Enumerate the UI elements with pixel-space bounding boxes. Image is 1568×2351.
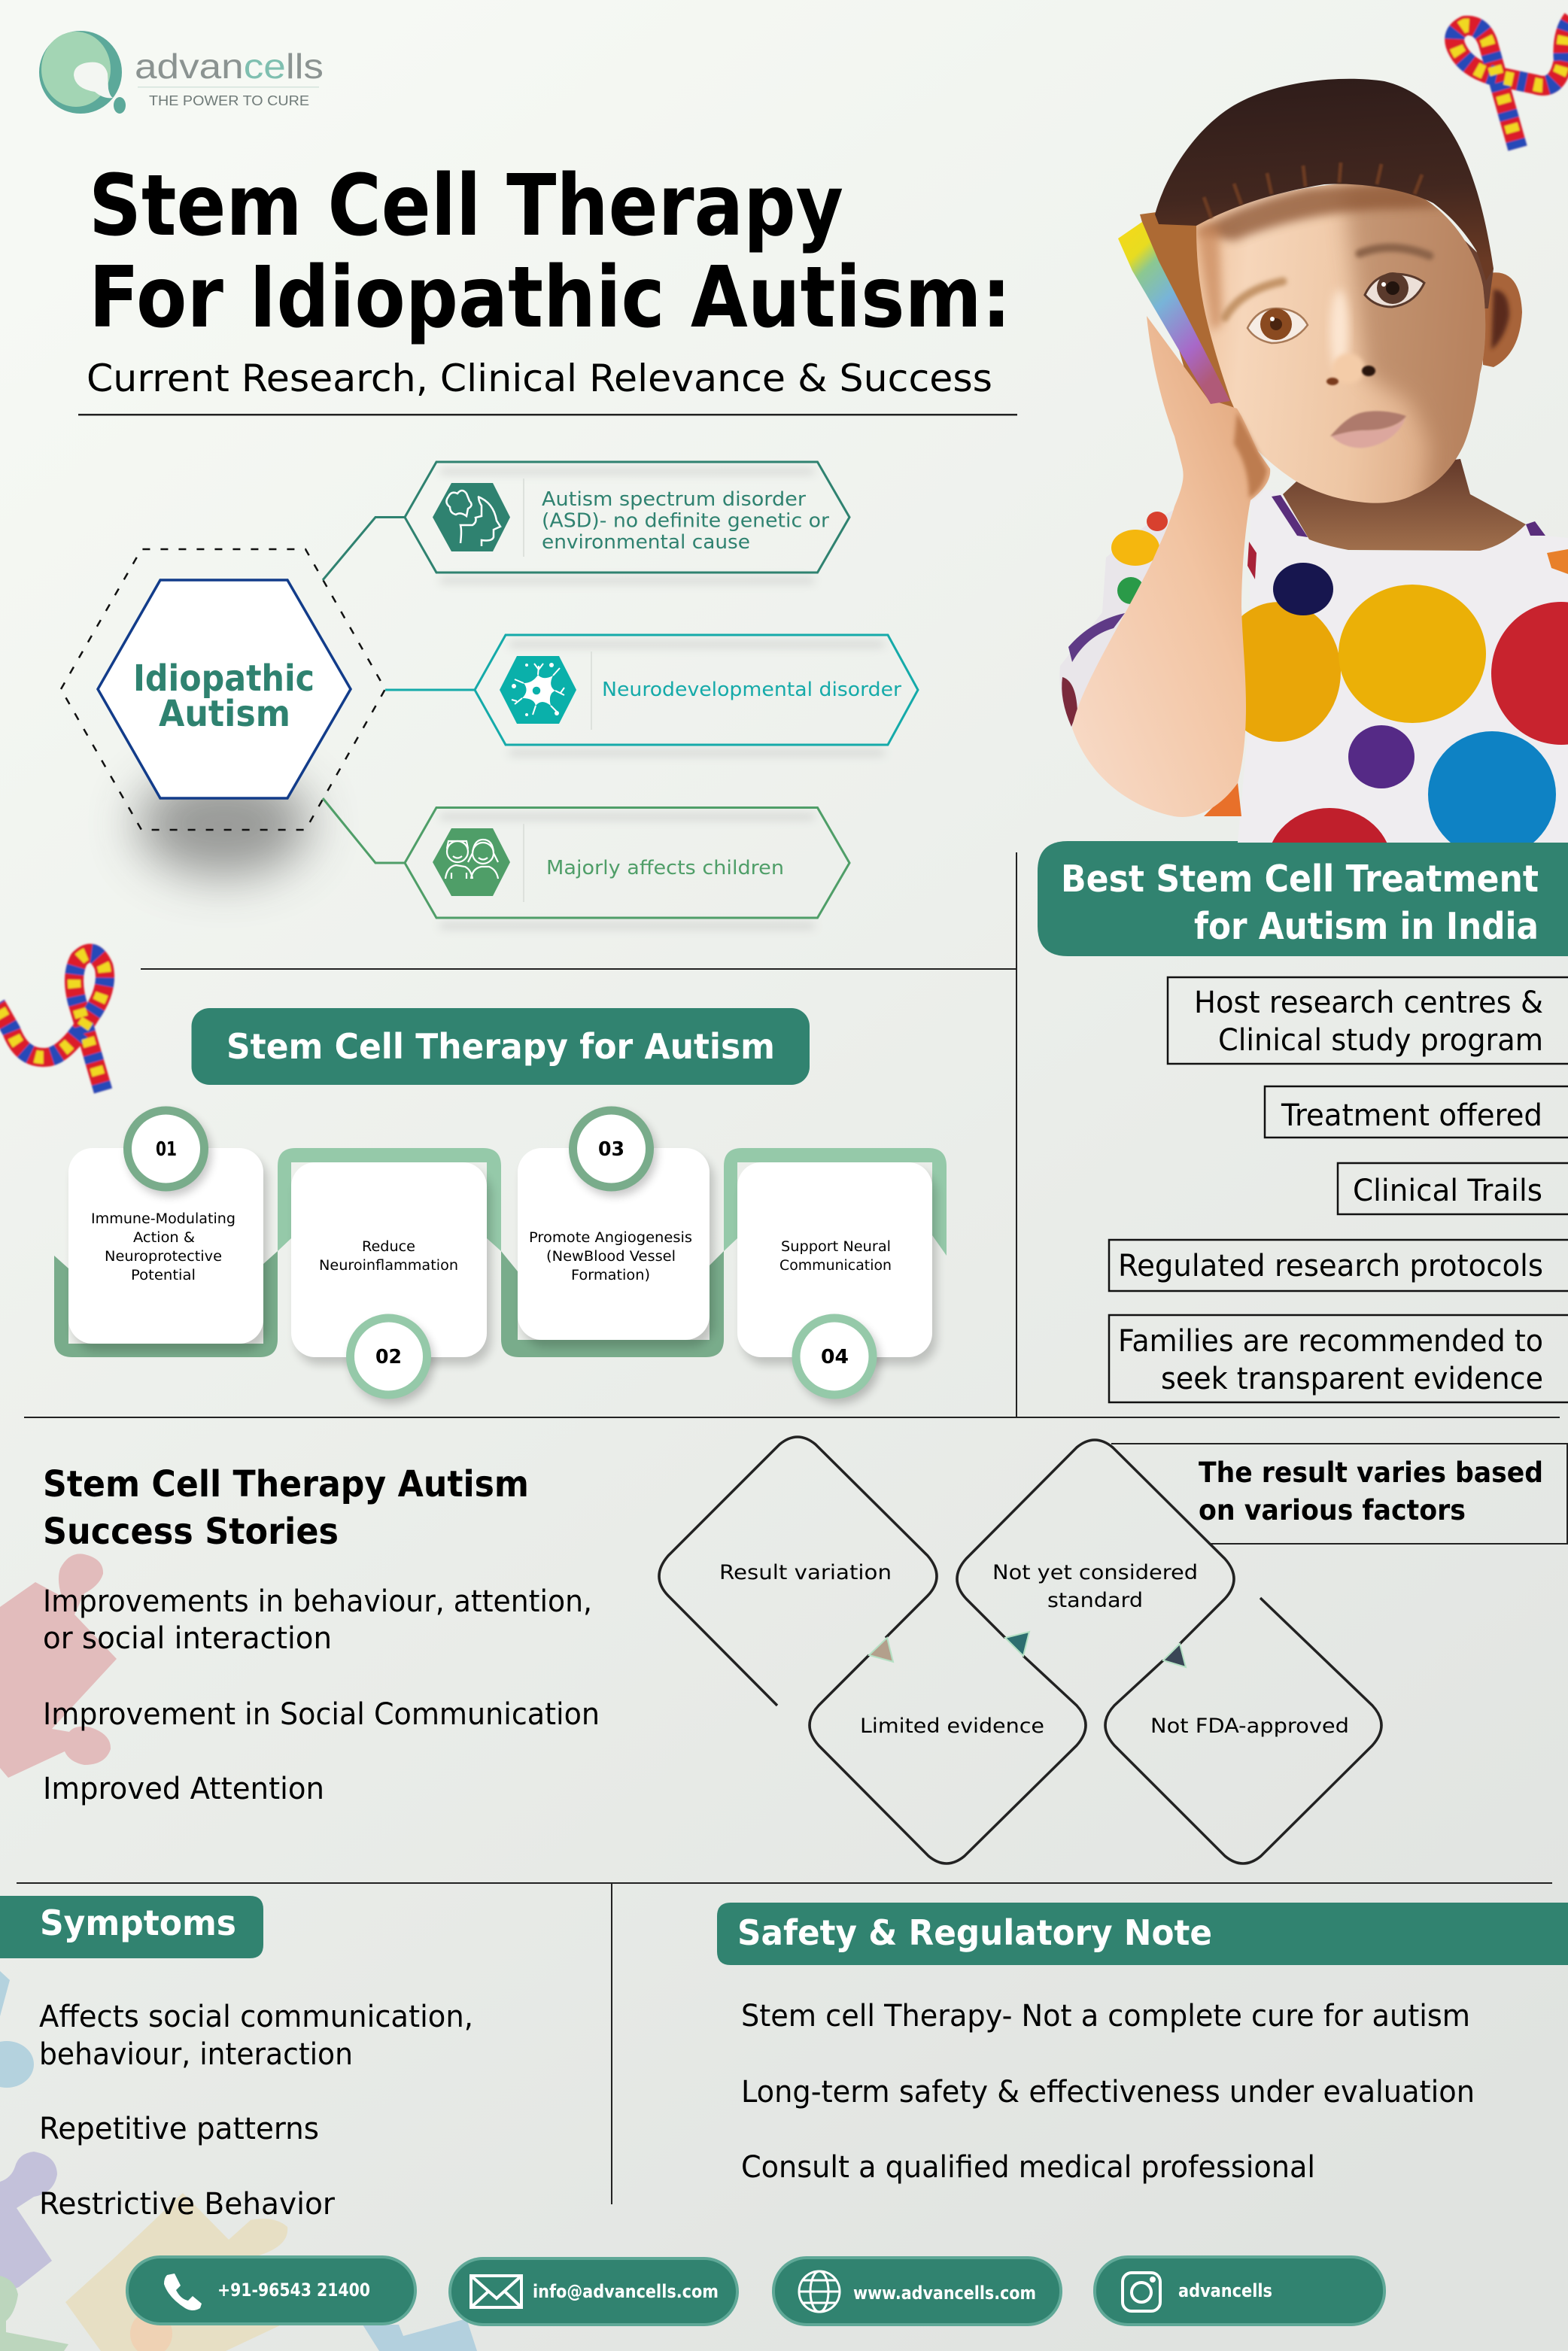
neck [1283, 459, 1526, 551]
diamond: result variation [659, 1437, 937, 1706]
text: success list: Improvement in Social Communication [43, 1697, 600, 1732]
diagram: four linked diamonds [659, 1437, 1381, 1863]
contact pill: instagram [1095, 2257, 1384, 2325]
card 01: Action & [133, 1230, 195, 1246]
box: majorly affects children [405, 808, 849, 928]
sideburn [1140, 205, 1238, 410]
eyebrows [1225, 248, 1430, 317]
shirt [1238, 495, 1568, 843]
card 04 [737, 1162, 937, 1365]
contact pill: instagram: advancells [1178, 2280, 1272, 2301]
heading: success stories: Stem Cell Therapy Autism [43, 1463, 529, 1505]
ear [1483, 272, 1522, 367]
orange patch below arm [1204, 782, 1241, 816]
title: Stem Cell Therapy [89, 157, 843, 255]
text: symptoms list: Repetitive patterns [39, 2112, 319, 2146]
card 02 [291, 1162, 491, 1365]
diagram: idiopathic autism [61, 462, 918, 928]
icon: neuron [500, 656, 576, 724]
heading: success stories: Success Stories [43, 1511, 339, 1553]
contact pill: email [450, 2258, 737, 2325]
banner: best stem cell treatment [1038, 841, 1568, 956]
badge 01: 01 [156, 1138, 177, 1161]
text: symptoms list [39, 2000, 473, 2222]
item: host research: Clinical study program [1218, 1023, 1543, 1058]
arrowhead: teal [1005, 1632, 1029, 1656]
diamond: limited evidence: Limited evidence [860, 1715, 1044, 1738]
text: success list: or social interaction [43, 1621, 332, 1656]
centre hexagon: Idiopathic [133, 658, 315, 700]
icon: two children [433, 828, 510, 896]
heading pill: safety and regulatory note [717, 1903, 1568, 1965]
item: families recommended [1109, 1315, 1568, 1402]
toy [1118, 222, 1230, 404]
arrowhead: tan [869, 1638, 893, 1662]
diamond: not yet considered: standard [1047, 1589, 1143, 1612]
text: safety list: Stem cell Therapy- Not a complete cure for autism [741, 1999, 1470, 2034]
badge 04 [792, 1314, 880, 1404]
badge 01 [123, 1106, 211, 1196]
card 02: Reduce [362, 1239, 415, 1255]
heading pill: symptoms: Symptoms [40, 1903, 236, 1943]
card 01: Potential [131, 1268, 196, 1283]
centre hexagon [98, 580, 351, 798]
card 04: Communication [779, 1258, 892, 1274]
face [1196, 184, 1485, 503]
callout: result varies: on various factors [1199, 1494, 1466, 1526]
contact pill: phone: +91-96543 21400 [217, 2280, 370, 2301]
item: families recommended: Families are recommended to [1118, 1324, 1543, 1359]
item: clinical trails: Clinical Trails [1353, 1174, 1542, 1208]
diamond: result variation: Result variation [719, 1561, 892, 1584]
text: safety list: Long-term safety & effectiveness under evaluation [741, 2075, 1475, 2110]
icon: globe [799, 2271, 840, 2312]
item: treatment offered [1265, 1086, 1568, 1138]
diamond: limited evidence [810, 1655, 1086, 1863]
text: safety list: Consult a qualified medical professional [741, 2150, 1315, 2185]
diamond: not yet considered: Not yet considered [992, 1561, 1198, 1584]
card 03: (NewBlood Vessel [546, 1249, 676, 1265]
badge 04: 04 [821, 1346, 849, 1368]
hair [1155, 79, 1494, 281]
heading: success stories [43, 1463, 529, 1553]
contact pill: website: www.advancells.com [853, 2283, 1036, 2304]
text: symptoms list: behaviour, interaction [39, 2037, 353, 2072]
dashed hexagon [61, 549, 385, 830]
card 04: Support Neural [781, 1239, 891, 1255]
icon: instagram [1123, 2273, 1160, 2311]
ribbon backing [54, 1148, 947, 1357]
box: autism spectrum disorder: (ASD)- no definite genetic or [542, 510, 829, 533]
title [89, 157, 1011, 347]
diamond: not fda-approved [1105, 1598, 1381, 1863]
box: autism spectrum disorder: environmental cause [542, 531, 750, 554]
card 01: Immune-Modulating [91, 1211, 236, 1227]
logo: advancells [39, 31, 324, 114]
item: regulated protocols [1109, 1240, 1568, 1291]
badge 03 [569, 1106, 657, 1196]
arrowhead: navy [1163, 1644, 1186, 1667]
connector lines [323, 518, 475, 863]
icon: head with puzzle piece [433, 483, 510, 551]
icon: envelope [471, 2276, 521, 2307]
diamond: not fda-approved: Not FDA-approved [1150, 1715, 1349, 1738]
heading pill: safety and regulatory note: Safety & Regulatory Note [737, 1912, 1212, 1953]
callout: result varies [1111, 1444, 1568, 1544]
contact pill: email: info@advancells.com [533, 2281, 719, 2302]
nose [1326, 354, 1375, 385]
item: treatment offered: Treatment offered [1281, 1098, 1542, 1133]
diamond: not yet considered [957, 1440, 1234, 1644]
text: success list: Improved Attention [43, 1772, 324, 1806]
box: neurodevelopmental disorder [475, 635, 918, 755]
icon: phone [164, 2274, 202, 2310]
mouth [1330, 411, 1406, 448]
arm and hand [1072, 316, 1270, 817]
ribbon: top right [1454, 19, 1568, 148]
callout: result varies: The result varies based [1199, 1456, 1543, 1489]
text: safety list [741, 1999, 1475, 2185]
hair backing behind temple [1399, 177, 1494, 308]
heading pill: symptoms [0, 1896, 263, 1958]
item: host research [1168, 977, 1568, 1064]
card 02: Neuroinflammation [319, 1258, 458, 1274]
process cards [54, 1106, 947, 1404]
item: host research: Host research centres & [1194, 986, 1543, 1020]
photo: boy with colourful toy [1059, 79, 1568, 922]
item: clinical trails [1338, 1163, 1568, 1214]
list: best treatment items [1109, 977, 1568, 1402]
logo: advancells: THE POWER TO CURE [149, 93, 309, 108]
box: majorly affects children: Majorly affects children [546, 857, 784, 879]
eye: left [1247, 308, 1308, 343]
box: autism spectrum disorder [405, 462, 849, 583]
text: symptoms list: Restrictive Behavior [39, 2187, 336, 2222]
centre hexagon: Autism [159, 693, 290, 735]
eye: right [1365, 272, 1424, 307]
box: autism spectrum disorder: Autism spectrum disorder [542, 488, 806, 511]
heading pill: stem cell therapy for autism [191, 1008, 810, 1085]
divider lines [17, 852, 1560, 2204]
heading pill: stem cell therapy for autism: Stem Cell Therapy for Autism [226, 1026, 775, 1067]
item: families recommended: seek transparent evidence [1161, 1362, 1543, 1396]
card 03: Promote Angiogenesis [529, 1230, 692, 1246]
badge 02: 02 [375, 1346, 402, 1368]
logo: advancells: advan cells [135, 47, 324, 86]
card 01 [68, 1148, 268, 1351]
card 03: Formation) [571, 1268, 650, 1283]
subtitle: Current Research, Clinical Relevance & Success [87, 357, 992, 400]
sleeve [1059, 508, 1196, 728]
puzzle background: red piece [0, 1554, 117, 1778]
card 03 [518, 1148, 714, 1347]
title: For Idiopathic Autism: [89, 249, 1011, 347]
ribbon: left [0, 953, 105, 1091]
text: symptoms list: Affects social communication, [39, 2000, 473, 2034]
badge 03: 03 [598, 1138, 624, 1161]
badge 02 [346, 1314, 434, 1404]
puzzle background: bottom-left pieces [0, 1971, 477, 2351]
text: success list [43, 1584, 600, 1806]
text: success list: Improvements in behaviour, attention, [43, 1584, 592, 1619]
card 01: Neuroprotective [105, 1249, 222, 1265]
contact pill: website [773, 2258, 1061, 2325]
contact pill: phone [127, 2257, 415, 2324]
box: neurodevelopmental disorder: Neurodevelopmental disorder [602, 679, 901, 701]
item: regulated protocols: Regulated research protocols [1118, 1249, 1543, 1283]
